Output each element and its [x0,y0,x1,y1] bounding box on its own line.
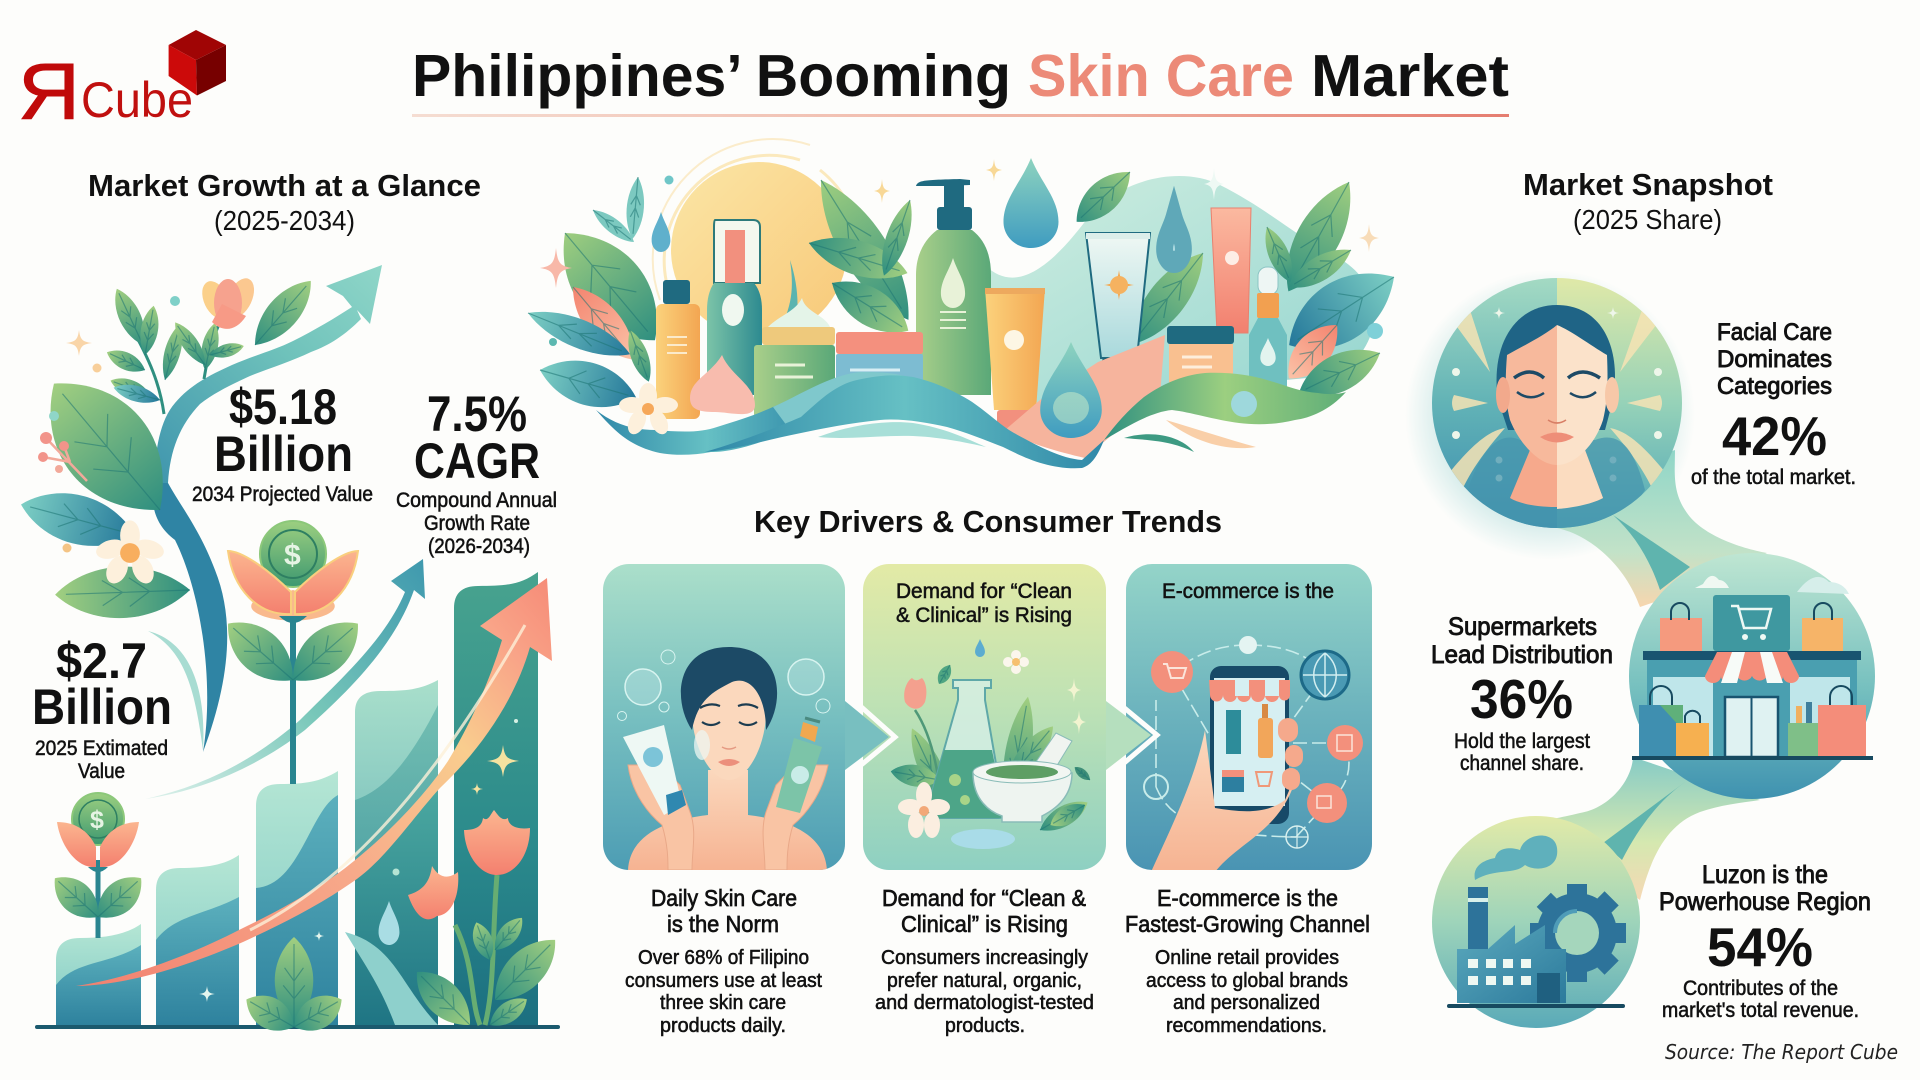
water drops [549,158,1383,346]
text: luzon: Luzon is the [1702,861,1828,889]
circle: factory [1432,816,1640,1028]
driver text: e-commerce: Fastest-Growing Channel [1125,911,1370,937]
driver text: clean and clinical: and dermatologist-tested [875,992,1094,1014]
ground [1632,756,1873,760]
plumeria [619,383,678,437]
text: facial care [1691,319,1856,489]
card text: E-commerce is the [1162,580,1334,603]
stat: 2.7 billion: $2.7 [56,633,147,689]
card text: Demand for “Clean [896,580,1072,603]
awning [1705,652,1799,683]
stat: 2.7 billion [32,633,172,783]
money flower: 2034 [214,521,372,784]
text: supermarkets [1431,613,1613,775]
text: luzon: Powerhouse Region [1659,888,1871,916]
heading: market growth at a glance: (2025-2034) [214,205,355,236]
circle: face [1432,278,1682,528]
arrow: thin teal growth [145,559,425,799]
driver text: daily skin care: consumers use at least [625,970,822,992]
driver text: e-commerce: recommendations. [1166,1015,1327,1037]
driver text: daily skin care: three skin care [660,992,786,1014]
text: facial care: Dominates [1717,346,1832,373]
driver text: e-commerce [1125,885,1370,1037]
wave centre [705,375,1104,468]
text: luzon: market's total revenue. [1662,999,1859,1022]
flask illustration [889,639,1093,849]
connector: face to store [1557,450,1767,607]
big green leaf [20,355,194,538]
bubbles [625,669,661,705]
plants on bars [199,719,568,1041]
driver text: clean and clinical: Clinical” is Rising [901,911,1068,937]
driver text: clean and clinical: prefer natural, organic, [887,970,1082,992]
plant: leaves and flowers around arrow [15,271,323,620]
salmon tube [1211,208,1251,333]
sparkles and dots [38,296,180,552]
driver text: clean and clinical: products. [945,1015,1025,1037]
tulip small [408,866,458,919]
text: facial care: Facial Care [1717,319,1832,346]
driver text: clean and clinical: Demand for “Clean & [882,885,1086,911]
heading: market snapshot [1523,167,1773,235]
money flower: 2034: $ [284,539,301,572]
text: luzon: Contributes of the [1683,977,1838,1000]
card text [896,580,1072,627]
logo cube icon [169,30,226,96]
leaves centre [775,161,1141,346]
stat: CAGR: 7.5% [427,386,527,442]
stat: CAGR: Growth Rate [424,512,530,535]
mint blob [985,176,1374,405]
windows [1468,959,1531,985]
driver text: daily skin care: products daily. [660,1015,786,1037]
puddle [951,829,1015,849]
stat: 5.18 billion: Billion [214,426,353,482]
hero illustration: skin care products [523,139,1410,468]
card: clean and clinical [863,564,1106,870]
roof bags [1660,618,1702,651]
ground [1447,1004,1625,1008]
stat: CAGR: Compound Annual [396,489,557,512]
wave green right [1104,373,1346,440]
plumeria [94,520,166,587]
phone illustration [1144,636,1363,872]
tall bottle [707,220,762,395]
title: Philippines’ Booming [412,43,1011,109]
cream swirl [690,355,755,414]
heading: market snapshot: Market Snapshot [1523,167,1773,202]
chimney [1468,887,1488,949]
leaves left [523,176,681,418]
flask [926,680,1004,818]
text: facial care: 42% [1722,405,1827,467]
right jar [1167,326,1234,384]
hair [1497,305,1615,430]
shoulders bg [1468,437,1645,528]
heading: key drivers: Key Drivers & Consumer Trends [754,504,1222,539]
chevron arrow 2 [1106,696,1157,775]
panel: market growth [15,168,568,1041]
circle: store [1629,553,1875,799]
card text: & Clinical” is Rising [896,604,1072,627]
text: supermarkets: 36% [1470,668,1573,730]
serum bottle [1249,267,1287,390]
heading: market growth at a glance [88,168,481,236]
arrow: big salmon [76,578,552,986]
heading: market growth at a glance: Market Growth at a Glance [88,168,481,203]
text: luzon [1659,861,1871,1022]
driver text: e-commerce: and personalized [1173,992,1320,1014]
text: supermarkets: channel share. [1460,752,1584,775]
small orange bottle [656,280,700,419]
salmon underlay [1005,335,1165,458]
sunscreen tube [1086,233,1150,383]
logo: RCube [18,30,226,136]
big drop [1040,342,1102,438]
driver text: daily skin care: Daily Skin Care [651,885,797,911]
leaves right [1117,172,1410,409]
driver text: clean and clinical [875,885,1094,1037]
text: facial care: of the total market. [1691,466,1856,489]
stat: CAGR [396,386,557,558]
mortar [973,773,1072,822]
money flower: 2025 [44,793,152,938]
driver text: e-commerce: E-commerce is the [1157,885,1338,911]
building [1457,925,1566,1003]
hand [1151,730,1298,872]
stat: CAGR: (2026-2034) [428,535,530,558]
card: daily skin care [603,564,845,870]
bottle [776,738,822,813]
driver text: clean and clinical: Consumers increasingly [881,947,1088,969]
pink flower [904,678,926,709]
driver text: e-commerce: access to global brands [1146,970,1348,992]
driver text: daily skin care: Over 68% of Filipino [638,947,809,969]
green jar [754,298,835,417]
logo wordmark: Cube [81,72,193,128]
wave left [596,397,818,455]
bar chart with growth [35,572,560,1029]
face [1506,325,1557,465]
heading: market snapshot: (2025 Share) [1573,204,1722,235]
bubble [1231,391,1257,417]
arrow: big teal leafy arrow [148,265,382,752]
panel: market snapshot [1405,167,1875,1028]
tulip large [464,810,530,875]
sign with cart [1713,595,1790,651]
source: Source: The Report Cube [1665,1040,1898,1064]
logo wordmark: Я [18,47,80,136]
chevron arrow 1 [845,696,895,775]
stat: 2.7 billion: Billion [32,679,172,735]
pump bottle [916,179,991,395]
top flower [197,274,260,329]
stat: 2.7 billion: 2025 Extimated [35,737,168,760]
gear [1530,884,1626,982]
rays [1450,310,1665,495]
soft shadow [1405,270,1695,560]
salmon jar [836,332,923,414]
sun [653,139,860,338]
stat: 5.18 billion [192,379,373,506]
card: e-commerce [1126,564,1372,872]
panel: key drivers cards [603,564,1372,1037]
pestle [1036,732,1072,764]
neck [1510,450,1603,507]
text: luzon: 54% [1707,916,1813,978]
money flower: 2025: $ [90,806,104,834]
stat: 2.7 billion: Value [78,760,125,783]
text: supermarkets: Hold the largest [1454,730,1590,753]
logo wordmark [18,47,193,136]
connector: store to factory [1533,757,1760,900]
shop [1647,660,1857,758]
lower green leaf [54,564,191,620]
teal leaf [15,481,141,558]
title [412,43,1509,117]
stat: 5.18 billion: $5.18 [229,379,337,435]
door [1725,697,1778,757]
base line [35,1025,560,1029]
bags [1639,705,1683,757]
wave crest [773,372,925,430]
white flower [898,782,950,838]
title: Market [1311,43,1509,109]
hands [628,765,694,870]
text: supermarkets: Lead Distribution [1431,641,1613,669]
text: supermarkets: Supermarkets [1448,613,1597,641]
woman illustration [618,647,830,870]
smoke [1475,835,1557,880]
title: Skin Care [1028,43,1294,109]
tube [623,725,682,815]
driver text: daily skin care: is the Norm [667,911,779,937]
phone [1210,666,1289,824]
stat: CAGR: CAGR [414,433,540,489]
sparkles [540,159,1379,288]
driver text: e-commerce: Online retail provides [1155,947,1339,969]
driver text: daily skin care [625,885,822,1037]
text: facial care: Categories [1717,373,1832,400]
orange tube [985,288,1045,432]
stat: 5.18 billion: 2034 Projected Value [192,483,373,506]
